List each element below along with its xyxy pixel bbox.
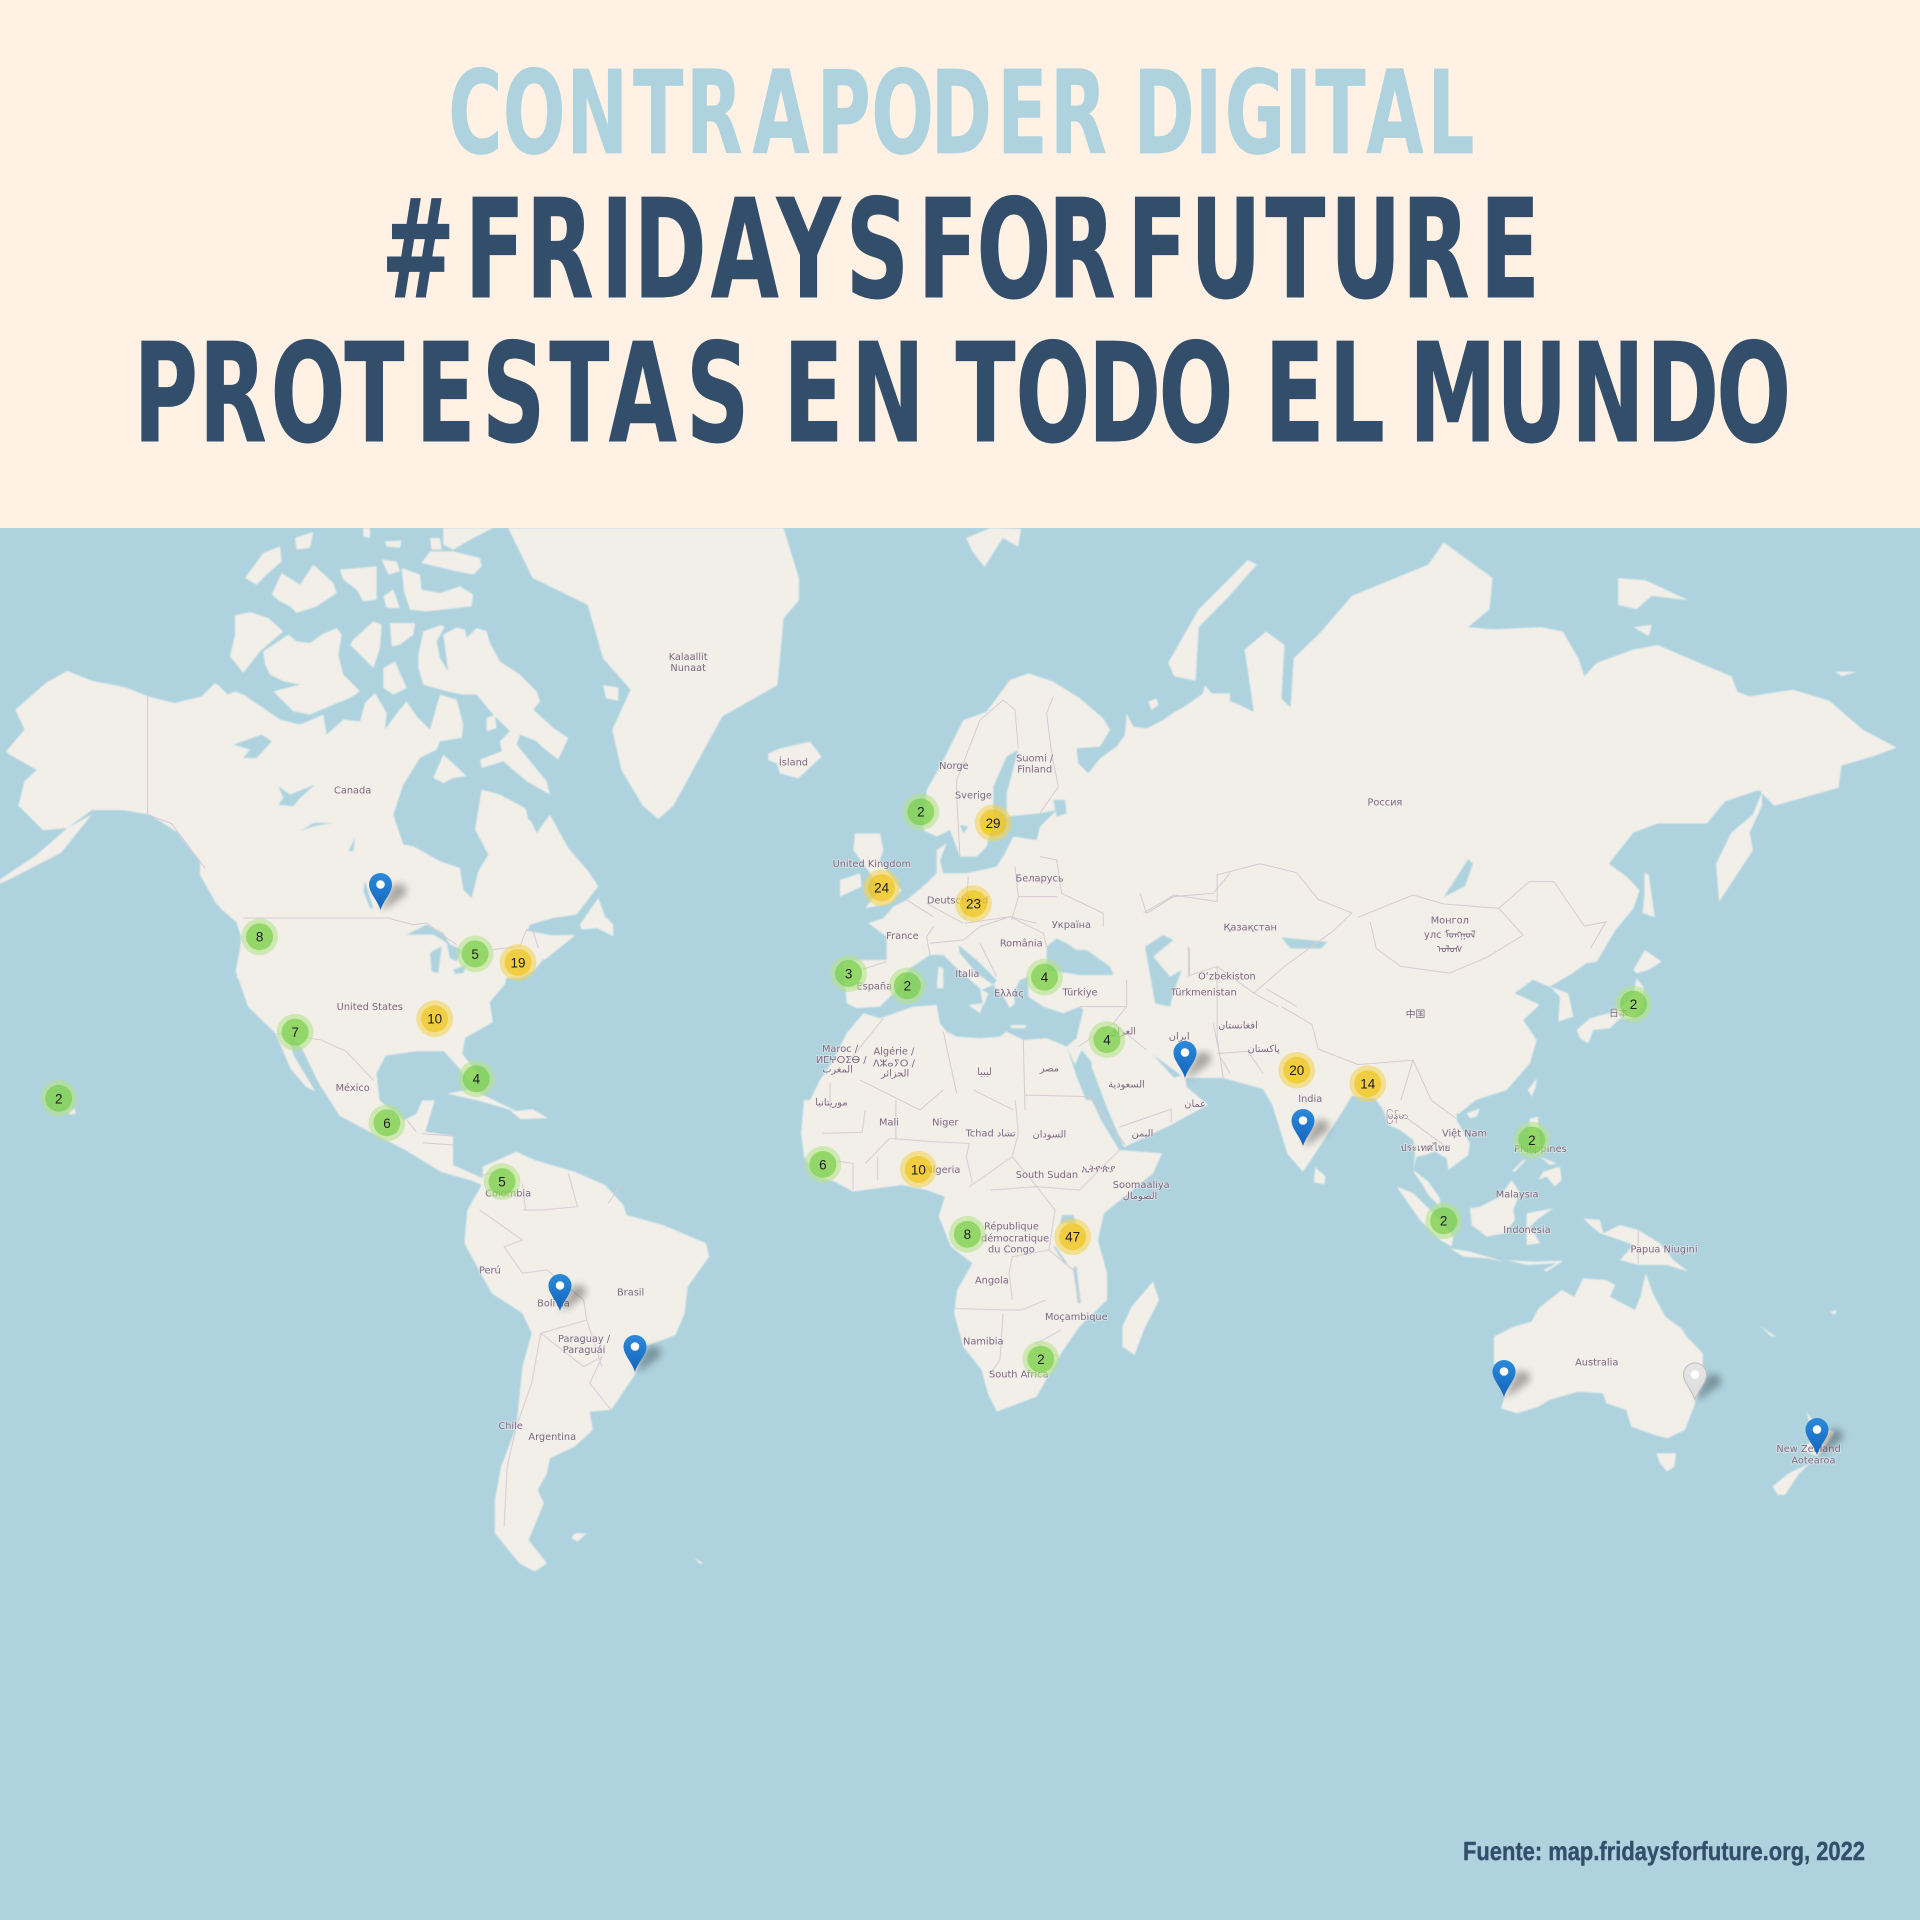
pin: southern India [1292,1109,1329,1146]
world map land masses [0,528,1897,1572]
map markers: green clusters: 6 [819,1157,827,1172]
pin: New Zealand [1806,1418,1843,1455]
country and region labels: Canada [334,785,371,796]
country and region labels: ⵍⵎⵖⵔⵉⴱ / [816,1055,867,1066]
country and region labels: France [886,931,919,942]
land: Europe, Turkey, North Africa, Middle East [768,673,1230,1110]
country and region labels: الصومال [1123,1191,1157,1202]
pin: southern Brazil [624,1335,661,1372]
country and region labels: Tchad تشاد [965,1128,1016,1139]
country and region labels: Italia [955,969,979,980]
title: #FridaysForFuture: #FRIDAYSFORFUTURE [381,171,1540,330]
country and region labels: العراق [1110,1027,1136,1038]
land: South America [464,1152,709,1572]
country and region labels: Niger [932,1117,959,1128]
country and region labels: Kalaallit [669,652,708,663]
country and region labels: 日本 [1609,1006,1629,1019]
country and region labels: Mali [879,1117,899,1128]
map markers: green clusters: 8 [256,930,263,945]
pin: Western Australia [1492,1360,1530,1397]
pin: eastern Australia (grey) [1684,1363,1721,1400]
country and region labels: ليبيا [977,1067,992,1078]
country and region labels: United States [337,1002,403,1013]
map markers: green clusters: 3 [845,966,852,981]
country and region labels: Sverige [955,790,992,801]
country and region labels: Türkmenistan [1170,988,1237,999]
country and region labels: السودان [1033,1130,1066,1141]
land: East and Southeast Asia, Japan, Indonesia, New Guinea [1373,950,1688,1272]
map markers: green clusters [40,793,1652,1378]
country and region labels: démocratique [981,1233,1049,1245]
country and region labels: United Kingdom [833,859,911,870]
country and region labels: Argentina [528,1432,576,1443]
map markers: yellow clusters: 10 [427,1012,442,1027]
country and region labels: Suomi / [1016,754,1054,765]
country and region labels: السعودية [1108,1079,1145,1090]
country and region labels: Moçambique [1045,1312,1108,1323]
country and region labels: Việt Nam [1442,1127,1487,1139]
land: Russia, Central Asia, China, India, Arabia [966,528,1897,1184]
country and region labels: South Africa [989,1370,1048,1381]
country and region labels: پاکستان [1248,1044,1280,1055]
country and region labels: Россия [1367,798,1402,809]
map markers: green clusters: 2 [1037,1352,1045,1367]
map markers: yellow clusters: 23 [966,897,981,912]
map markers: green clusters: 4 [1041,970,1049,985]
country and region labels: Soomaaliya [1113,1180,1170,1191]
country and region labels: India [1298,1094,1322,1105]
country and region labels: موريتانيا [815,1098,848,1109]
country and region labels: Oʻzbekiston [1198,972,1256,983]
country and region labels: Paraguái [563,1344,605,1356]
country and region labels: улс ᠮᠣᠩᠭᠣᠯ [1424,929,1476,941]
map markers: location pins [369,873,1843,1455]
country and region labels: Deutschland [927,896,988,907]
country and region labels: Namibia [963,1336,1004,1347]
map markers: green clusters: 2 [1630,997,1637,1012]
map markers: yellow clusters: 14 [1360,1077,1376,1092]
country and region labels: Nigeria [925,1165,960,1176]
country and region labels: Қазақстан [1223,923,1277,934]
country and region labels: Україна [1052,920,1091,931]
inland seas and lakes [233,735,1473,1303]
country and region labels: ኢትዮጵያ [1082,1164,1115,1175]
pin: Canada [369,873,406,910]
country and region labels: Philippines [1514,1144,1567,1155]
map markers: green clusters: 7 [291,1025,299,1040]
country and region labels: Paraguay / [558,1334,611,1345]
title: Protestas en todo el mundo: PROTESTAS EN TODO EL MUNDO [134,315,1791,474]
map markers: green clusters: 4 [1103,1032,1111,1047]
country and region labels: اليمن [1132,1128,1153,1139]
map markers: green clusters: 2 [55,1091,63,1106]
title: Contrapoder Digital: CONTRAPODER DIGITAL [448,46,1474,180]
map markers: green clusters: 6 [383,1116,391,1131]
country and region labels: Nunaat [670,663,706,674]
map markers: yellow clusters: 24 [874,881,890,896]
header panel [0,0,1920,528]
country and region labels: Australia [1575,1357,1618,1368]
country and region labels: Aotearoa [1791,1455,1836,1466]
map background: ocean [0,528,1920,1920]
country and region labels: Indonesia [1503,1225,1551,1236]
country and region labels: ⴷⵣⴰⵢⵔ / [873,1059,916,1070]
country and region labels: ایران [1169,1032,1190,1043]
country and region labels: Malaysia [1496,1190,1539,1201]
country and region labels: افغانستان [1218,1021,1258,1032]
country and region labels: Türkiye [1061,988,1098,999]
country and region labels: Perú [479,1264,501,1276]
country and region labels [334,652,1841,1466]
land: Canada mainland and Arctic islands [200,528,613,978]
country and region labels: Colombia [485,1188,531,1199]
country and region labels: République [984,1220,1039,1232]
country and region labels: المغرب [822,1065,853,1076]
map markers: green clusters: 4 [473,1072,481,1087]
country and region labels: 中国 [1406,1008,1425,1021]
country and region labels: Papua Niugini [1631,1245,1698,1256]
map markers: yellow clusters: 10 [911,1162,926,1177]
land: Africa south and Madagascar [801,1100,1162,1412]
map markers: green clusters: 2 [904,979,911,994]
country and region labels: România [1000,938,1043,950]
map markers: yellow clusters: 29 [986,816,1001,831]
country and region labels: الجزائر [880,1068,909,1079]
map markers: yellow clusters [416,804,1386,1255]
pin: Bolivia [548,1274,586,1311]
country and region labels: España [856,981,892,992]
country and region labels: Монгол [1431,915,1469,926]
country and region labels: ᠤᠯᠤᠰ [1437,944,1463,956]
country and region labels: Maroc / [822,1044,859,1055]
country and region labels: ประเทศไทย [1400,1142,1450,1154]
map markers: green clusters: 5 [498,1175,506,1190]
map markers: green clusters: 2 [1440,1214,1447,1229]
map markers: green clusters: 2 [1528,1133,1536,1148]
country and region labels: Ísland [779,755,808,768]
country and region labels: du Congo [988,1245,1035,1256]
map markers: green clusters: 8 [964,1227,971,1242]
country and region labels: Chile [498,1421,523,1432]
country and region labels: مصر [1039,1063,1059,1074]
country and region labels: Algérie / [873,1045,915,1057]
land: Alaska, USA, Mexico, Central America, Greenland [0,528,799,1190]
country and region labels: Ελλάς [994,988,1024,1000]
land: Australia and New Zealand [1494,1273,1837,1495]
map markers: green clusters: 5 [471,947,479,962]
country and region labels: မြန်မာ [1386,1108,1408,1124]
map markers: green clusters: 2 [917,805,925,820]
map markers: yellow clusters: 20 [1289,1063,1304,1078]
country and region labels: Norge [939,761,969,772]
country and region labels: Bolivia [537,1299,570,1310]
map markers: yellow clusters: 47 [1065,1230,1080,1245]
country and region labels: Беларусь [1016,874,1064,885]
pin: Persian Gulf [1174,1041,1211,1078]
country and region labels: South Sudan [1016,1170,1078,1181]
country and region labels: عمان [1184,1099,1206,1110]
country and region labels: México [336,1082,370,1094]
map markers: yellow clusters: 19 [510,955,525,970]
country and region labels: New Zealand [1776,1444,1841,1455]
country borders [148,696,1638,1527]
country and region labels: Angola [975,1275,1009,1286]
country and region labels: Finland [1017,765,1052,776]
country and region labels: Brasil [617,1288,644,1299]
